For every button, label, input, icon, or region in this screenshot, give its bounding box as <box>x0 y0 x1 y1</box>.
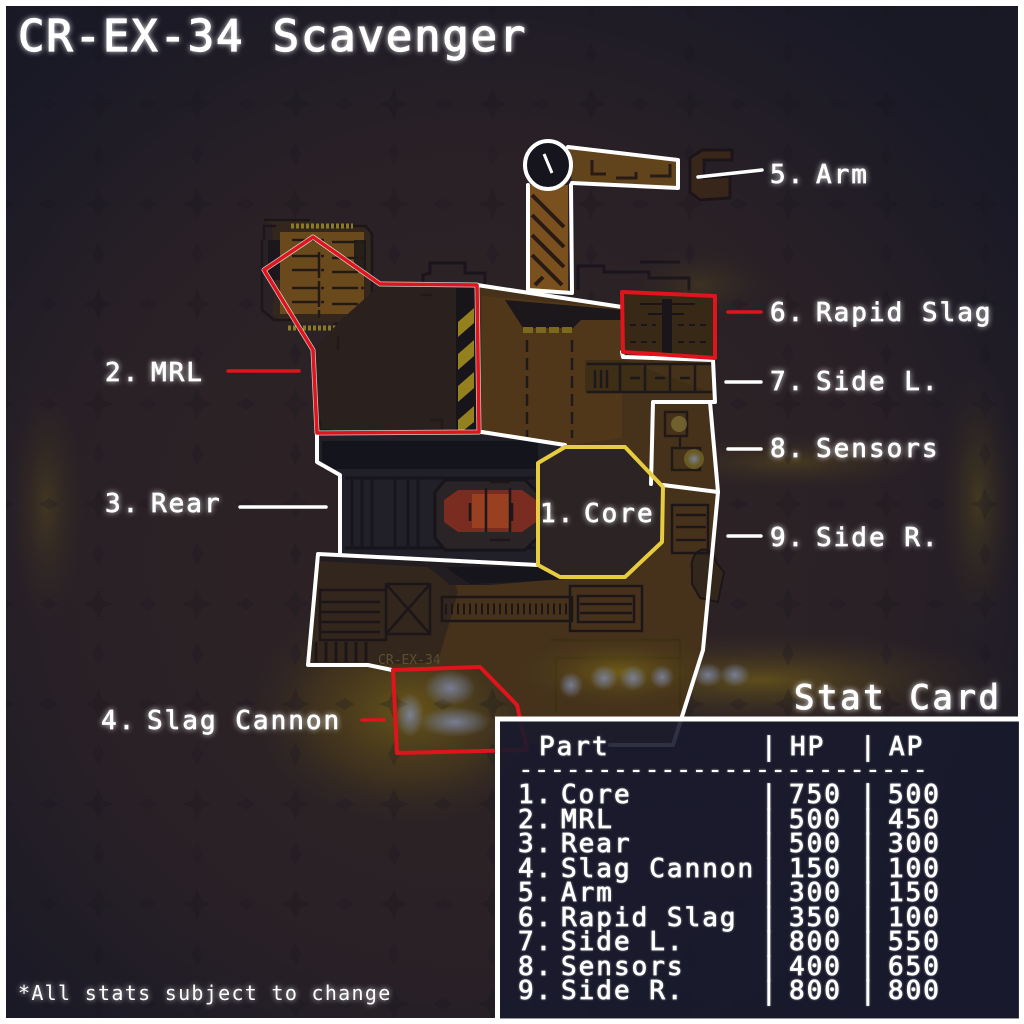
table header: Part <box>539 732 610 762</box>
row 2: 500 <box>789 805 842 835</box>
row 5: | <box>761 878 779 908</box>
table header: AP <box>889 732 924 762</box>
MRL dark plate <box>313 285 477 432</box>
row 1: 500 <box>888 780 941 810</box>
row 6: 350 <box>789 903 842 933</box>
title: CR-EX-34 Scavenger <box>18 11 527 62</box>
table header: HP <box>790 732 825 762</box>
row 2 <box>518 805 941 835</box>
label: rapid slag: Rapid Slag <box>816 298 993 328</box>
row 3: | <box>761 829 779 859</box>
row 5 <box>518 878 941 908</box>
row 3: 300 <box>888 829 941 859</box>
lower hull details: CR-EX-34 <box>378 653 441 668</box>
row 7: 550 <box>888 927 941 957</box>
table divider: -------------------------- <box>518 755 928 785</box>
glow blobs <box>396 663 750 737</box>
outline: arm <box>525 141 678 293</box>
arm fill <box>525 141 678 291</box>
row 3 <box>518 829 941 859</box>
row 8: | <box>860 952 878 982</box>
outline: rapid slag <box>622 292 715 358</box>
row 2: | <box>860 805 878 835</box>
label: MRL: 2. <box>105 358 140 388</box>
label: rear: 3. <box>105 489 140 519</box>
label: rapid slag: 6. <box>770 298 805 328</box>
ship illustration <box>262 141 750 745</box>
label: sensors: 8. <box>770 434 805 464</box>
label: side R: 9. <box>770 523 805 553</box>
label: arm: 5. <box>770 160 805 190</box>
outline: MRL <box>264 237 479 433</box>
row 6: | <box>761 903 779 933</box>
row 9: | <box>761 976 779 1006</box>
row 8: | <box>761 952 779 982</box>
row 6: | <box>860 903 878 933</box>
side L detail <box>587 364 713 392</box>
row 1: Core <box>561 780 632 810</box>
row 3: | <box>860 829 878 859</box>
table header <box>539 732 924 762</box>
label: side R: Side R. <box>816 523 940 553</box>
row 6: 100 <box>888 903 941 933</box>
label: slag cannon: 4. <box>101 706 136 736</box>
row 2: MRL <box>561 805 614 835</box>
label: sensors: Sensors <box>816 434 940 464</box>
row 8: 650 <box>888 952 941 982</box>
row 1: 1. <box>518 780 553 810</box>
label: slag cannon: Slag Cannon <box>147 706 341 736</box>
row 4: 4. <box>518 854 553 884</box>
top conduits <box>423 262 689 290</box>
row 7: 7. <box>518 927 553 957</box>
hull <box>308 285 718 745</box>
row 5: Arm <box>561 878 614 908</box>
row 4: | <box>761 854 779 884</box>
lower hull details <box>316 505 735 714</box>
row 4: Slag Cannon <box>561 854 755 884</box>
row 5: 150 <box>888 878 941 908</box>
rapid slag fill <box>622 292 715 358</box>
row 5: | <box>860 878 878 908</box>
stat card table panel <box>498 719 1022 1021</box>
outer turret <box>262 220 374 328</box>
label: core: 1. <box>540 499 575 529</box>
row 9: | <box>860 976 878 1006</box>
stat card heading: Stat Card <box>794 678 1002 718</box>
row 3: 500 <box>789 829 842 859</box>
rear dark section <box>317 435 565 565</box>
label: MRL: MRL <box>151 358 204 388</box>
row 4 <box>518 854 941 884</box>
table header: | <box>860 732 878 762</box>
row 3: Rear <box>561 829 632 859</box>
row 9: 800 <box>888 976 941 1006</box>
row 7: | <box>761 927 779 957</box>
part outlines <box>264 141 718 753</box>
outline: core <box>538 447 663 577</box>
row 1 <box>518 780 941 810</box>
label: core: Core <box>584 499 655 529</box>
row 8: 8. <box>518 952 553 982</box>
row 1: 750 <box>789 780 842 810</box>
label: side L: Side L. <box>816 367 940 397</box>
row 7: 800 <box>789 927 842 957</box>
row 2: 2. <box>518 805 553 835</box>
table header: | <box>761 732 779 762</box>
row 5: 300 <box>789 878 842 908</box>
row 2: | <box>761 805 779 835</box>
row 6 <box>518 903 941 933</box>
row 2: 450 <box>888 805 941 835</box>
row 3: 3. <box>518 829 553 859</box>
row 9 <box>518 976 941 1006</box>
label: arm: Arm <box>816 160 869 190</box>
row 4: 150 <box>789 854 842 884</box>
row 8: Sensors <box>561 952 685 982</box>
outline: white hull segments <box>308 285 718 745</box>
row 4: | <box>860 854 878 884</box>
row 9: 800 <box>789 976 842 1006</box>
row 7: | <box>860 927 878 957</box>
row 9: Side R. <box>561 976 685 1006</box>
row 1: | <box>761 780 779 810</box>
row 7: Side L. <box>561 927 685 957</box>
outer arm tip <box>690 150 732 200</box>
row 1: | <box>860 780 878 810</box>
core plate <box>538 447 663 577</box>
row 8: 400 <box>789 952 842 982</box>
row 7 <box>518 927 941 957</box>
row 8 <box>518 952 941 982</box>
sensor panel <box>654 403 712 487</box>
label: rear: Rear <box>151 489 222 519</box>
row 6: Rapid Slag <box>561 903 738 933</box>
part labels <box>101 160 993 736</box>
label: side L: 7. <box>770 367 805 397</box>
row 9: 9. <box>518 976 553 1006</box>
row 6: 6. <box>518 903 553 933</box>
row 4: 100 <box>888 854 941 884</box>
stat card table text <box>518 732 941 1006</box>
leader lines <box>228 170 762 720</box>
outline: slag cannon <box>393 667 527 753</box>
footnote: *All stats subject to change <box>18 981 392 1005</box>
row 5: 5. <box>518 878 553 908</box>
